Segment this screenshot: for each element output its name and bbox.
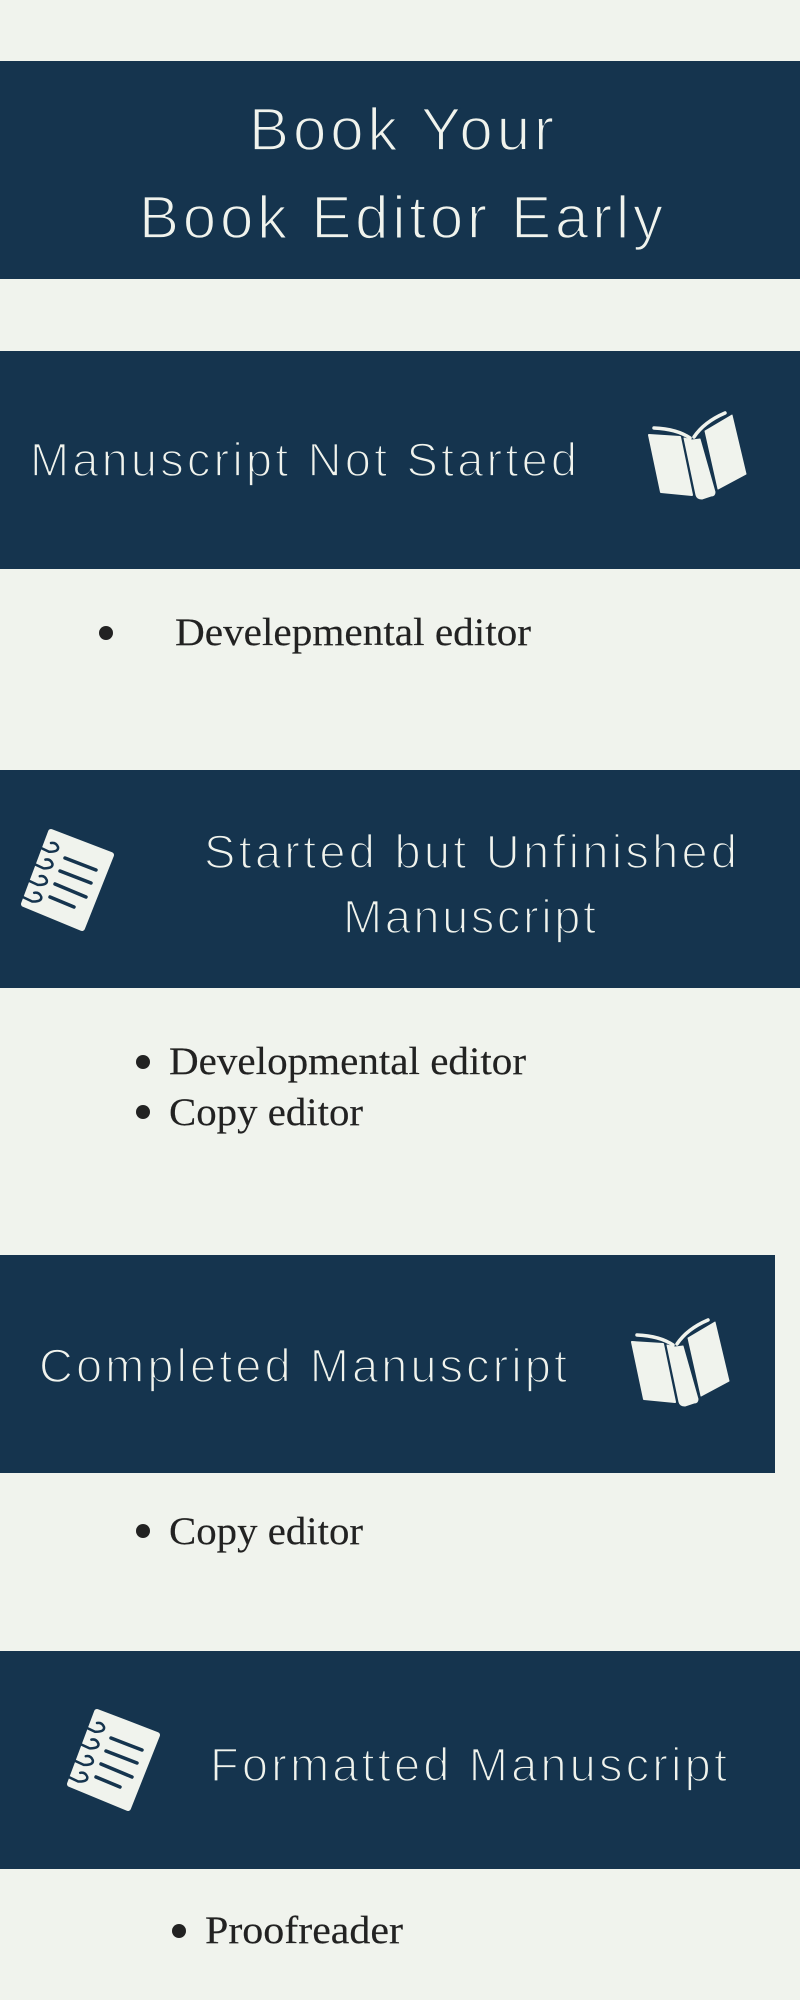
title: Book Editor Early (139, 184, 663, 251)
icon: spiral notepad (22, 832, 111, 928)
panel: manuscript not started (0, 351, 800, 569)
panel: formatted manuscript (0, 1651, 800, 1869)
heading: completed manuscript: Completed Manuscript (39, 1339, 567, 1392)
icon: spiral notepad (68, 1712, 157, 1808)
bullet list: manuscript not started: Develepmental editor (175, 611, 531, 654)
title: Book Your (249, 96, 554, 163)
bullet list: completed manuscript: Copy editor (169, 1510, 363, 1553)
heading: started but unfinished manuscript: Manuscript (343, 890, 596, 943)
heading: started but unfinished manuscript: Started but Unfinished (204, 825, 737, 878)
bullet list: started but unfinished: Copy editor (169, 1091, 363, 1134)
bullet list: started but unfinished (136, 1040, 526, 1134)
heading: started but unfinished manuscript (204, 825, 737, 943)
bullet list: formatted manuscript: Proofreader (205, 1909, 403, 1952)
bullet list: started but unfinished: Developmental editor (169, 1040, 526, 1083)
heading: formatted manuscript: Formatted Manuscript (210, 1738, 727, 1791)
panel: completed manuscript (0, 1255, 775, 1473)
panel: started but unfinished (0, 770, 800, 988)
icon: open book (632, 1320, 729, 1406)
title banner (0, 61, 800, 279)
icon: open book (649, 413, 746, 499)
heading: manuscript not started: Manuscript Not Started (30, 433, 577, 486)
title (139, 96, 663, 251)
